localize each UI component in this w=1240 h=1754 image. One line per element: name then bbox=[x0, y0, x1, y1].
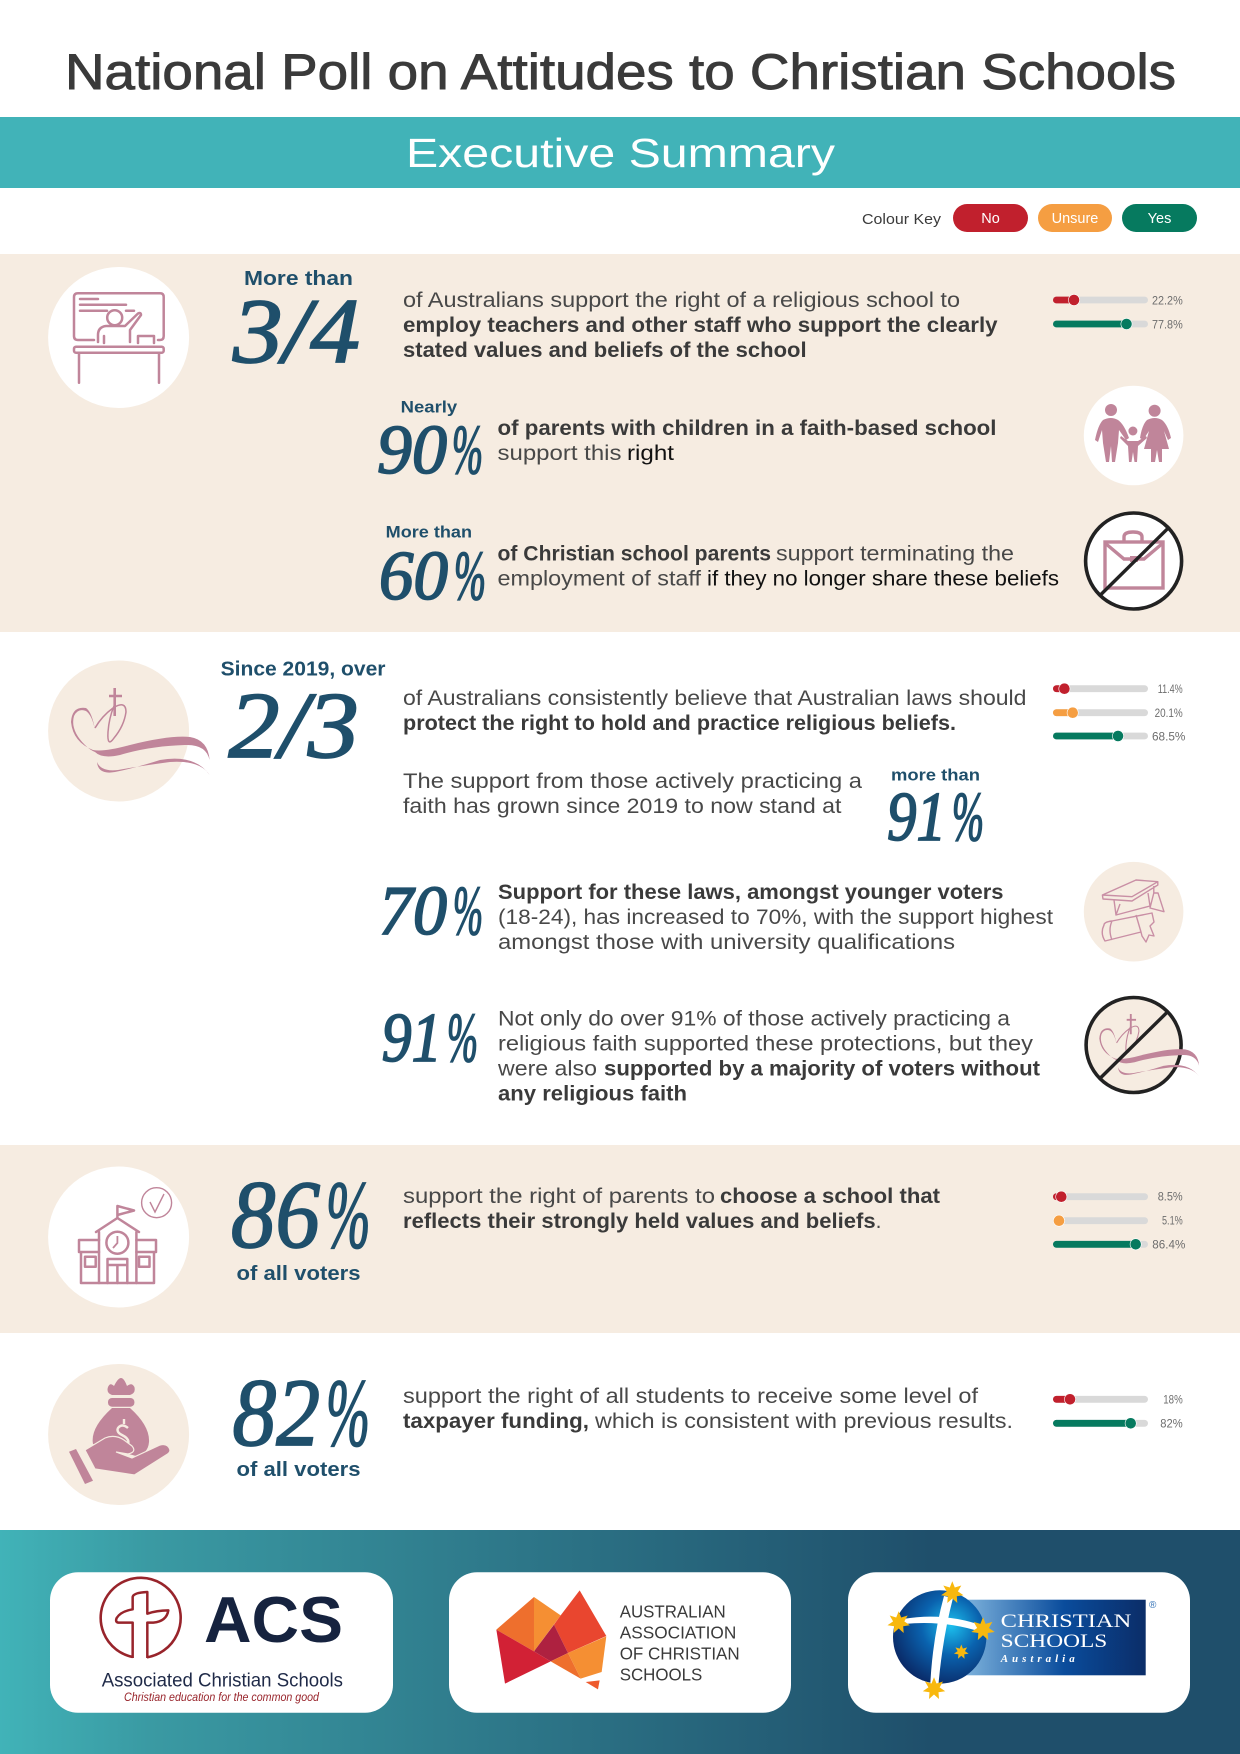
bar chart: staff support: 22.2% bbox=[1152, 294, 1183, 308]
legend: colour key: No bbox=[981, 211, 1000, 227]
text: younger voters: Support for these laws, amongst younger voters bbox=[498, 881, 1004, 904]
text: christian school parents: support terminating the bbox=[776, 543, 1014, 566]
icon: school building bbox=[48, 1166, 189, 1308]
text: younger voters: (18-24), has increased to 70%, with the support highest bbox=[498, 906, 1053, 929]
logo: christian schools australia: CHRISTIAN bbox=[1001, 1611, 1132, 1632]
stat: 91 percent practicing: 91 bbox=[887, 779, 946, 856]
text: employ teachers: employ teachers and other staff who support the clearly bbox=[403, 314, 998, 337]
label: more than: More than bbox=[386, 523, 472, 542]
text: choose a school bbox=[403, 1185, 940, 1233]
text: faith-based parents: support this bbox=[498, 442, 622, 465]
legend: colour key: Yes bbox=[1148, 211, 1171, 227]
text: taxpayer funding: taxpayer funding, bbox=[403, 1410, 589, 1433]
bar chart: taxpayer funding: 82% bbox=[1160, 1416, 1183, 1430]
stat: 91 percent faith: % bbox=[447, 1000, 478, 1077]
icon: teacher at board bbox=[48, 267, 189, 408]
stat: 86 percent: 86 bbox=[231, 1161, 320, 1268]
logo: australian association of christian schools: ASSOCIATION bbox=[620, 1622, 736, 1642]
banner: executive summary: Executive Summary bbox=[406, 130, 836, 176]
caption: of all voters: of all voters bbox=[236, 1459, 360, 1481]
logo: associated christian schools: ACS bbox=[204, 1583, 343, 1656]
text: majority of voters: were also bbox=[497, 1058, 597, 1081]
text: christian school parents: of Christian school parents bbox=[498, 543, 771, 566]
text: faith-based parents bbox=[498, 417, 996, 465]
stat: 70 percent: 70 bbox=[379, 873, 447, 950]
text: faith-based parents: of parents with children in a faith-based school bbox=[498, 417, 996, 440]
logo: australian association of christian schools: AUSTRALIAN bbox=[620, 1602, 726, 1622]
footer: partner logos bbox=[0, 1530, 1240, 1754]
text: employ teachers bbox=[403, 289, 998, 362]
text: majority of voters bbox=[497, 1008, 1040, 1106]
text: choose a school: choose a school that bbox=[720, 1185, 940, 1208]
bar chart: religious laws bbox=[1053, 682, 1186, 744]
text: majority of voters: religious faith supported these protections, but they bbox=[498, 1033, 1034, 1056]
text: employ teachers: stated values and beliefs of the school bbox=[403, 339, 807, 362]
stat: 91 percent faith: 91 bbox=[382, 1000, 442, 1077]
bar chart: school choice: 5.1% bbox=[1162, 1214, 1183, 1228]
bar chart: religious laws: 20.1% bbox=[1155, 706, 1183, 720]
bar chart: religious laws: 11.4% bbox=[1158, 682, 1183, 696]
text: choose a school: . bbox=[876, 1210, 881, 1233]
stat: 86 percent: % bbox=[326, 1161, 370, 1268]
panel: staff beliefs bbox=[0, 254, 1240, 632]
text: younger voters: amongst those with university qualifications bbox=[498, 931, 955, 954]
bar chart: religious laws: 68.5% bbox=[1152, 730, 1186, 744]
stat: three quarters: 3/4 bbox=[232, 280, 360, 382]
stat: 90 percent: % bbox=[452, 412, 483, 489]
title: National Poll on Attitudes to Christian Schools bbox=[65, 44, 1176, 100]
icon: graduation cap and diploma bbox=[1084, 862, 1183, 962]
text: growing support: The support from those actively practicing a bbox=[403, 770, 862, 793]
logo: associated christian schools: Associated Christian Schools bbox=[102, 1670, 343, 1692]
label: more than: more than bbox=[891, 766, 980, 785]
caption: of all voters: of all voters bbox=[236, 1263, 360, 1285]
logo: christian schools australia: Australia bbox=[1000, 1653, 1075, 1665]
logo: associated christian schools bbox=[50, 1572, 393, 1713]
stat: 60 percent: 60 bbox=[379, 538, 448, 615]
text: taxpayer funding: support the right of all students to receive some level of bbox=[403, 1385, 978, 1408]
text: growing support bbox=[403, 770, 862, 818]
icon: family bbox=[1084, 386, 1183, 485]
bar chart: taxpayer funding: 18% bbox=[1163, 1392, 1183, 1406]
text: growing support: faith has grown since 2019 to now stand at bbox=[403, 795, 842, 818]
stat: two thirds: 2/3 bbox=[228, 674, 359, 778]
stat: 70 percent: % bbox=[453, 873, 483, 950]
stat: 60 percent bbox=[379, 538, 486, 615]
panel: school choice bbox=[0, 1145, 1240, 1333]
heading: since 2019: Since 2019, over bbox=[221, 659, 386, 681]
text: protect the right: of Australians consistently believe that Australian laws should bbox=[403, 687, 1026, 710]
stat: 82 percent bbox=[232, 1359, 370, 1466]
legend: colour key bbox=[862, 204, 1197, 232]
bar chart: school choice bbox=[1053, 1190, 1186, 1251]
text: majority of voters: supported by a majority of voters without bbox=[604, 1058, 1040, 1081]
label: nearly: Nearly bbox=[401, 397, 458, 416]
panel: religious freedom laws bbox=[48, 659, 1199, 1106]
text: employ teachers: of Australians support the right of a religious school to bbox=[403, 289, 960, 312]
logo: australian association of christian schools bbox=[449, 1572, 791, 1713]
text: choose a school: reflects their strongly held values and beliefs bbox=[403, 1210, 876, 1233]
bar chart: staff support: 77.8% bbox=[1152, 318, 1183, 332]
legend: colour key: Colour Key bbox=[862, 212, 942, 228]
text: choose a school: support the right of parents to bbox=[403, 1185, 715, 1208]
icon: no briefcase bbox=[1086, 513, 1182, 609]
logo: christian schools australia: SCHOOLS bbox=[1001, 1631, 1107, 1652]
icon: money bag in hand bbox=[48, 1364, 189, 1505]
stat: 86 percent bbox=[231, 1161, 370, 1268]
text: majority of voters: any religious faith bbox=[498, 1083, 687, 1106]
stat: 70 percent bbox=[379, 873, 483, 950]
logo: australian association of christian schools: OF CHRISTIAN bbox=[620, 1643, 740, 1663]
stat: 90 percent bbox=[377, 412, 483, 489]
stat: 82 percent: % bbox=[326, 1359, 370, 1466]
text: taxpayer funding bbox=[403, 1385, 1013, 1433]
logo: christian schools australia: ® bbox=[1149, 1600, 1157, 1611]
text: christian school parents bbox=[498, 543, 1059, 591]
text: taxpayer funding: which is consistent with previous results. bbox=[594, 1410, 1013, 1433]
stat: 60 percent: % bbox=[454, 538, 486, 615]
icon: no faith bbox=[1086, 998, 1199, 1092]
logo: christian schools australia bbox=[848, 1572, 1190, 1713]
text: majority of voters: Not only do over 91% of those actively practicing a bbox=[498, 1008, 1010, 1031]
heading: more than: More than bbox=[244, 268, 353, 290]
bar chart: staff support bbox=[1053, 294, 1183, 332]
logo: australian association of christian schools: SCHOOLS bbox=[620, 1664, 702, 1684]
banner: executive summary bbox=[0, 117, 1240, 188]
text: protect the right: protect the right to hold and practice religious beliefs. bbox=[403, 712, 956, 735]
text: christian school parents: if they no longer share these beliefs bbox=[707, 568, 1059, 591]
bar chart: school choice: 8.5% bbox=[1158, 1190, 1183, 1204]
stat: 82 percent: 82 bbox=[232, 1359, 320, 1466]
logo: associated christian schools: Christian education for the common good bbox=[124, 1690, 319, 1704]
text: christian school parents: employment of staff bbox=[498, 568, 701, 591]
panel: taxpayer funding bbox=[48, 1359, 1183, 1505]
bar chart: school choice: 86.4% bbox=[1152, 1237, 1186, 1251]
text: faith-based parents: right bbox=[627, 442, 674, 465]
text: protect the right bbox=[403, 687, 1026, 735]
legend: colour key: Unsure bbox=[1052, 211, 1098, 227]
stat: 90 percent: 90 bbox=[377, 412, 447, 489]
text: younger voters bbox=[498, 881, 1053, 954]
stat: 91 percent practicing: % bbox=[952, 779, 984, 856]
bar chart: taxpayer funding bbox=[1053, 1392, 1183, 1430]
icon: heart and cross bbox=[48, 660, 210, 802]
